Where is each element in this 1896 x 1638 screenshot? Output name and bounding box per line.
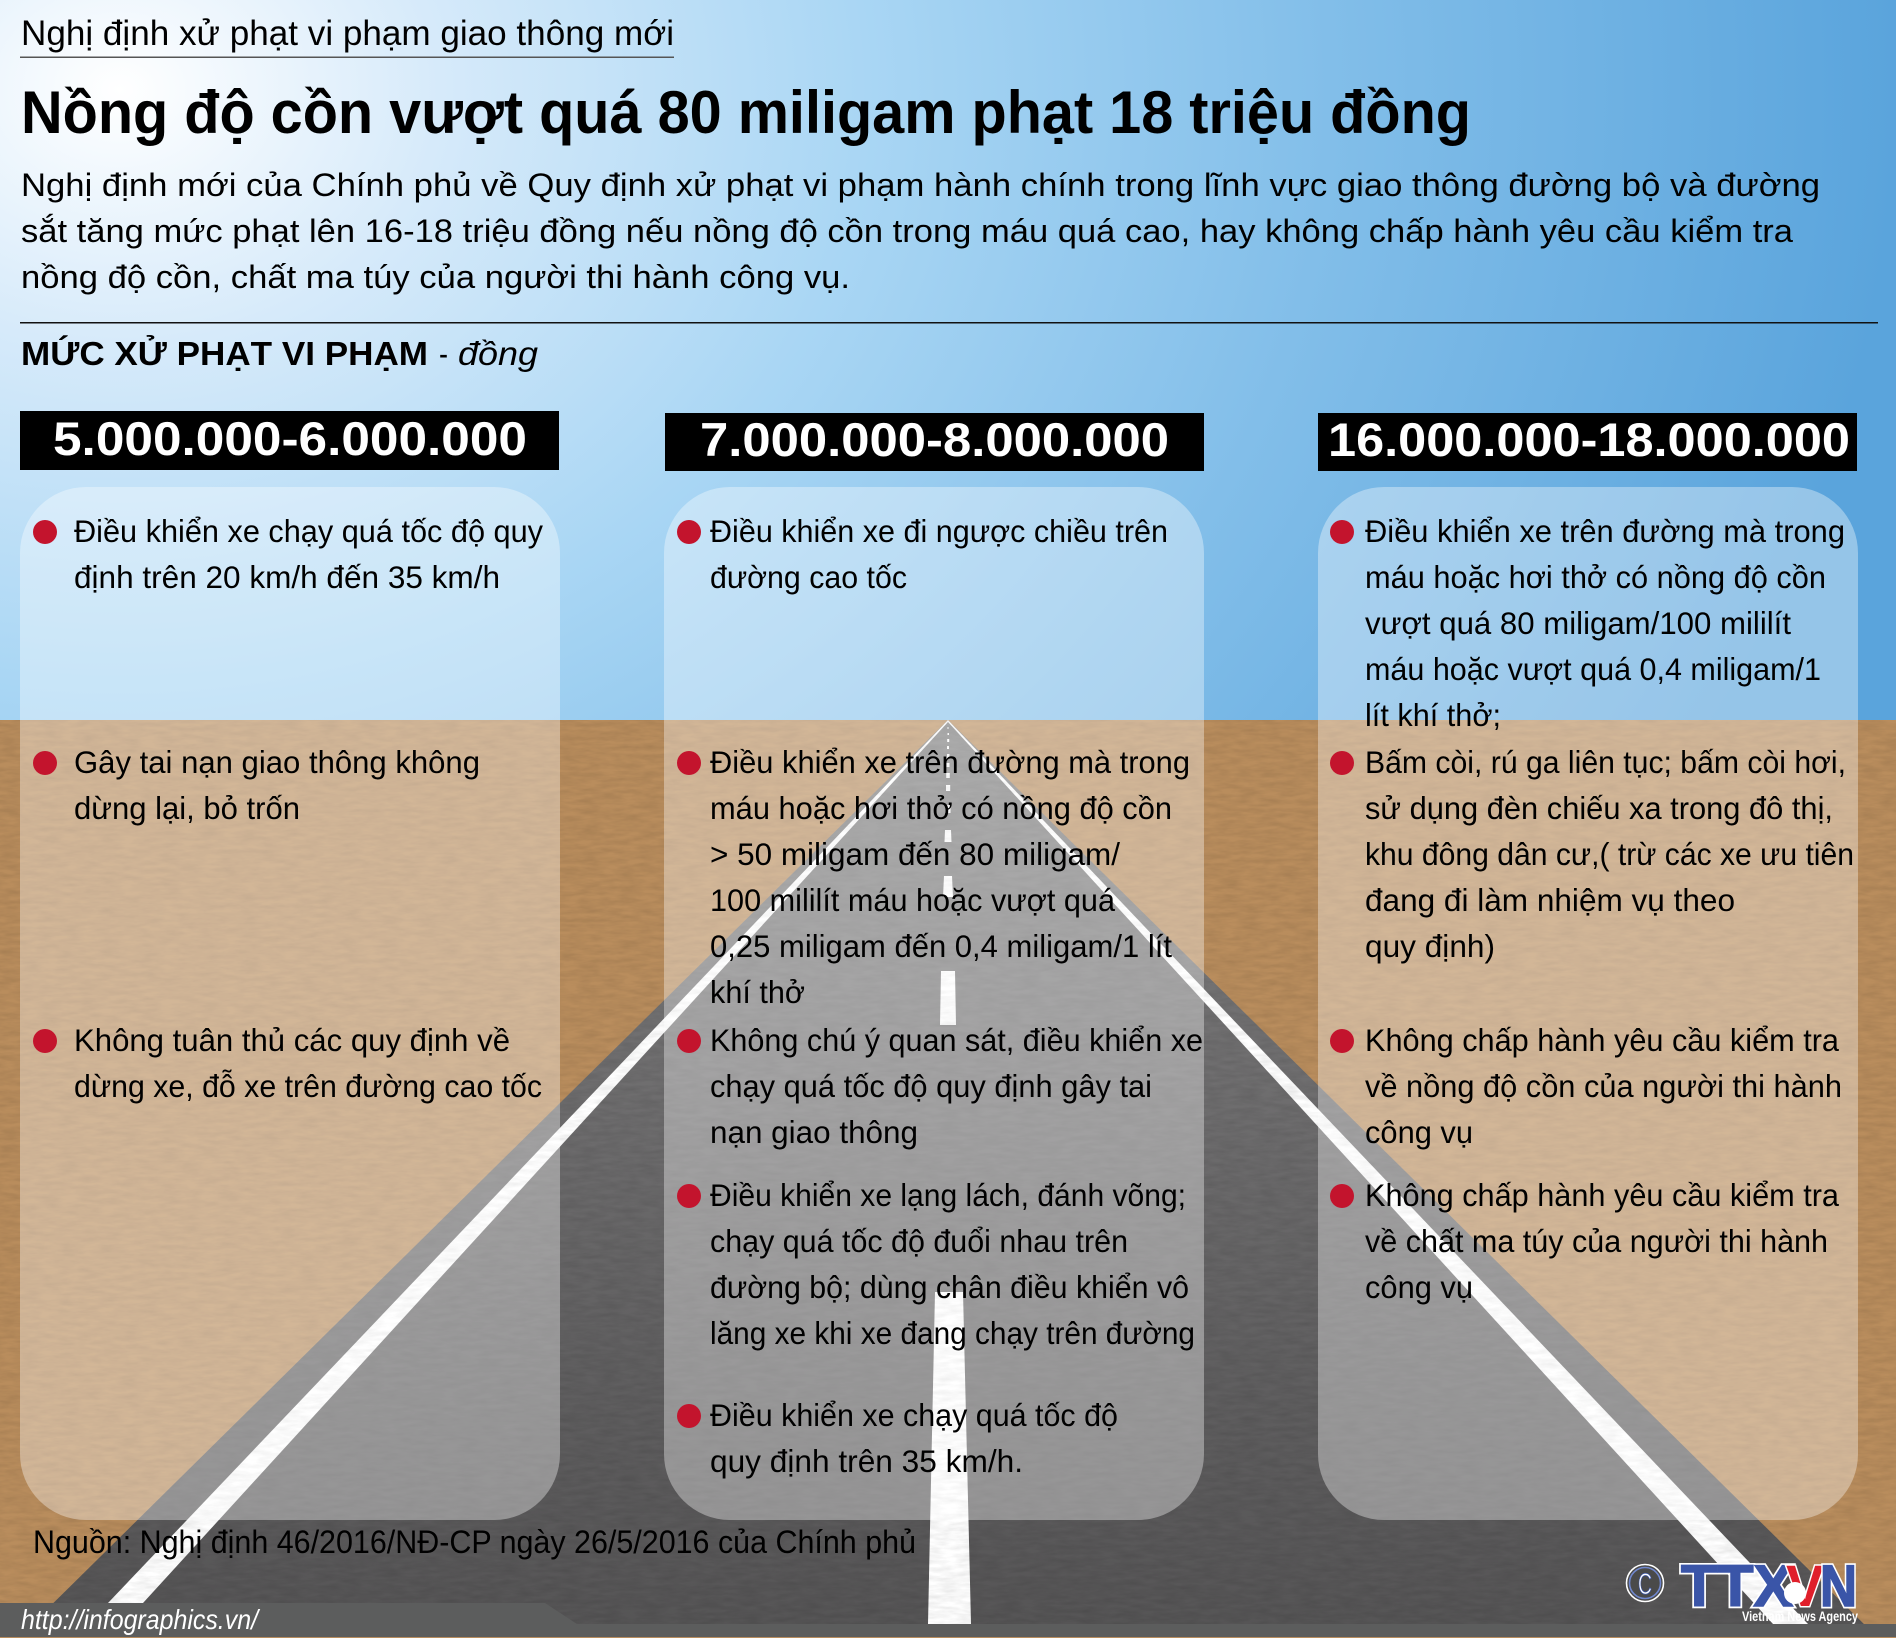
item: expressway parking: dừng xe, đỗ xe trên đường cao tốc xyxy=(74,1068,542,1104)
item: alcohol 50-80: 0,25 miligam đến 0,4 miligam/1 lít xyxy=(710,928,1172,964)
item: expressway parking xyxy=(33,1022,542,1104)
item: wrong way: đường cao tốc xyxy=(710,559,907,595)
item: inattention: chạy quá tốc độ quy định gây tai xyxy=(710,1068,1152,1104)
item: alcohol 50-80: > 50 miligam đến 80 miligam/ xyxy=(710,836,1120,872)
item: inattention: Không chú ý quan sát, điều khiển xe xyxy=(710,1022,1203,1058)
item: refuse alcohol test: Không chấp hành yêu cầu kiểm tra xyxy=(1365,1022,1839,1058)
bottom strip xyxy=(0,1603,1896,1637)
logo: TTXVN xyxy=(1626,1554,1858,1624)
item: horn: Bấm còi, rú ga liên tục; bấm còi hơi, xyxy=(1365,744,1846,780)
road edge line right xyxy=(948,720,1808,1624)
section heading: MỨC XỬ PHẠT VI PHẠM xyxy=(21,335,428,373)
item: expressway parking: Không tuân thủ các quy định về xyxy=(74,1022,510,1058)
item: alcohol 50-80: khí thở xyxy=(710,974,805,1010)
road xyxy=(26,720,1870,1630)
item: wrong way: Điều khiển xe đi ngược chiều trên xyxy=(710,513,1168,549)
item: speeding over 35: Điều khiển xe chạy quá tốc độ xyxy=(710,1397,1118,1433)
logo tagline: Vietnam News Agency xyxy=(1742,1608,1858,1624)
logo letters xyxy=(1681,1554,1857,1619)
copyright mark: C xyxy=(1638,1568,1652,1601)
item: speeding 20-35: Điều khiển xe chạy quá tốc độ quy xyxy=(74,513,543,549)
intro paragraph xyxy=(21,167,1820,295)
item: alcohol over 80: máu hoặc vượt quá 0,4 miligam/1 xyxy=(1365,651,1821,687)
section heading: đồng xyxy=(458,336,538,373)
sky background xyxy=(0,0,1896,720)
item: refuse alcohol test: công vụ xyxy=(1365,1114,1473,1150)
subtitle: Nghị định xử phạt vi phạm giao thông mới xyxy=(21,14,674,53)
logo letters: V xyxy=(1786,1554,1824,1619)
item: horn: đang đi làm nhiệm vụ theo xyxy=(1365,882,1735,918)
road centre dashes xyxy=(928,727,971,1624)
section heading: - xyxy=(439,336,448,373)
item: refuse drug test xyxy=(1330,1177,1839,1305)
item: refuse drug test: công vụ xyxy=(1365,1269,1473,1305)
panel: column 3 xyxy=(1318,487,1858,1520)
item: wrong way xyxy=(677,513,1168,595)
intro paragraph: Nghị định mới của Chính phủ về Quy định xử phạt vi phạm hành chính trong lĩnh vực giao thông đường bộ và đường xyxy=(21,167,1820,203)
item: alcohol 50-80: Điều khiển xe trên đường mà trong xyxy=(710,744,1190,780)
title: Nồng độ cồn vượt quá 80 miligam phạt 18 triệu đồng xyxy=(21,79,1471,146)
copyright mark xyxy=(1626,1564,1664,1602)
panel: column 2 xyxy=(664,487,1204,1520)
logo letters: N xyxy=(1820,1554,1857,1619)
item: speeding 20-35 xyxy=(33,513,543,595)
item: refuse alcohol test: về nồng độ cồn của người thi hành xyxy=(1365,1068,1842,1104)
item: weaving: đường bộ; dùng chân điều khiển vô xyxy=(710,1269,1189,1305)
intro paragraph: sắt tăng mức phạt lên 16-18 triệu đồng nếu nồng độ cồn trong máu quá cao, hay không chấp hành yêu cầu kiểm tra xyxy=(21,213,1793,249)
item: horn: sử dụng đèn chiếu xa trong đô thị, xyxy=(1365,790,1833,826)
item: refuse drug test: về chất ma túy của người thi hành xyxy=(1365,1223,1828,1259)
item: alcohol over 80 xyxy=(1330,513,1845,733)
item: hit and run: Gây tai nạn giao thông không xyxy=(74,744,480,780)
ground texture xyxy=(0,720,1896,1625)
item: speeding over 35 xyxy=(677,1397,1118,1479)
item: weaving xyxy=(677,1177,1195,1351)
item: inattention: nạn giao thông xyxy=(710,1114,918,1150)
logo letters: TTX xyxy=(1681,1554,1793,1619)
item: alcohol over 80: vượt quá 80 miligam/100 mililít xyxy=(1365,605,1791,641)
sand ground xyxy=(0,720,1896,1638)
logo letters: TTX xyxy=(1681,1554,1793,1619)
logo letters: N xyxy=(1820,1554,1857,1619)
panel: column 1 xyxy=(20,487,560,1520)
item: alcohol 50-80: máu hoặc hơi thở có nồng độ cồn xyxy=(710,790,1172,826)
item: inattention xyxy=(677,1022,1203,1150)
source note: Nguồn: Nghị định 46/2016/NĐ-CP ngày 26/5/2016 của Chính phủ xyxy=(33,1524,916,1560)
website url: http://infographics.vn/ xyxy=(21,1604,261,1635)
item: alcohol over 80: máu hoặc hơi thở có nồng độ cồn xyxy=(1365,559,1826,595)
item: speeding over 35: quy định trên 35 km/h. xyxy=(710,1443,1023,1479)
item: alcohol over 80: Điều khiển xe trên đường mà trong xyxy=(1365,513,1845,549)
item: alcohol 50-80: 100 mililít máu hoặc vượt quá xyxy=(710,882,1115,918)
item: refuse drug test: Không chấp hành yêu cầu kiểm tra xyxy=(1365,1177,1839,1213)
fine band 3: 16.000.000-18.000.000 xyxy=(1328,413,1850,466)
road edge line left xyxy=(108,720,948,1603)
item: hit and run: dừng lại, bỏ trốn xyxy=(74,790,300,826)
item: hit and run xyxy=(33,744,480,826)
item: horn: khu đông dân cư,( trừ các xe ưu tiên xyxy=(1365,836,1854,872)
item: alcohol over 80: lít khí thở; xyxy=(1365,697,1501,733)
item: speeding 20-35: định trên 20 km/h đến 35 km/h xyxy=(74,559,500,595)
fine band 1: 5.000.000-6.000.000 xyxy=(53,412,527,465)
item: weaving: lăng xe khi xe đang chạy trên đường xyxy=(710,1315,1195,1351)
item: weaving: chạy quá tốc độ đuổi nhau trên xyxy=(710,1223,1128,1259)
item: horn: quy định) xyxy=(1365,928,1495,964)
intro paragraph: nồng độ cồn, chất ma túy của người thi hành công vụ. xyxy=(21,259,850,295)
item: alcohol 50-80 xyxy=(677,744,1190,1010)
fine band 2: 7.000.000-8.000.000 xyxy=(700,413,1169,466)
item: refuse alcohol test xyxy=(1330,1022,1842,1150)
item: horn xyxy=(1330,744,1854,964)
item: weaving: Điều khiển xe lạng lách, đánh võng; xyxy=(710,1177,1186,1213)
